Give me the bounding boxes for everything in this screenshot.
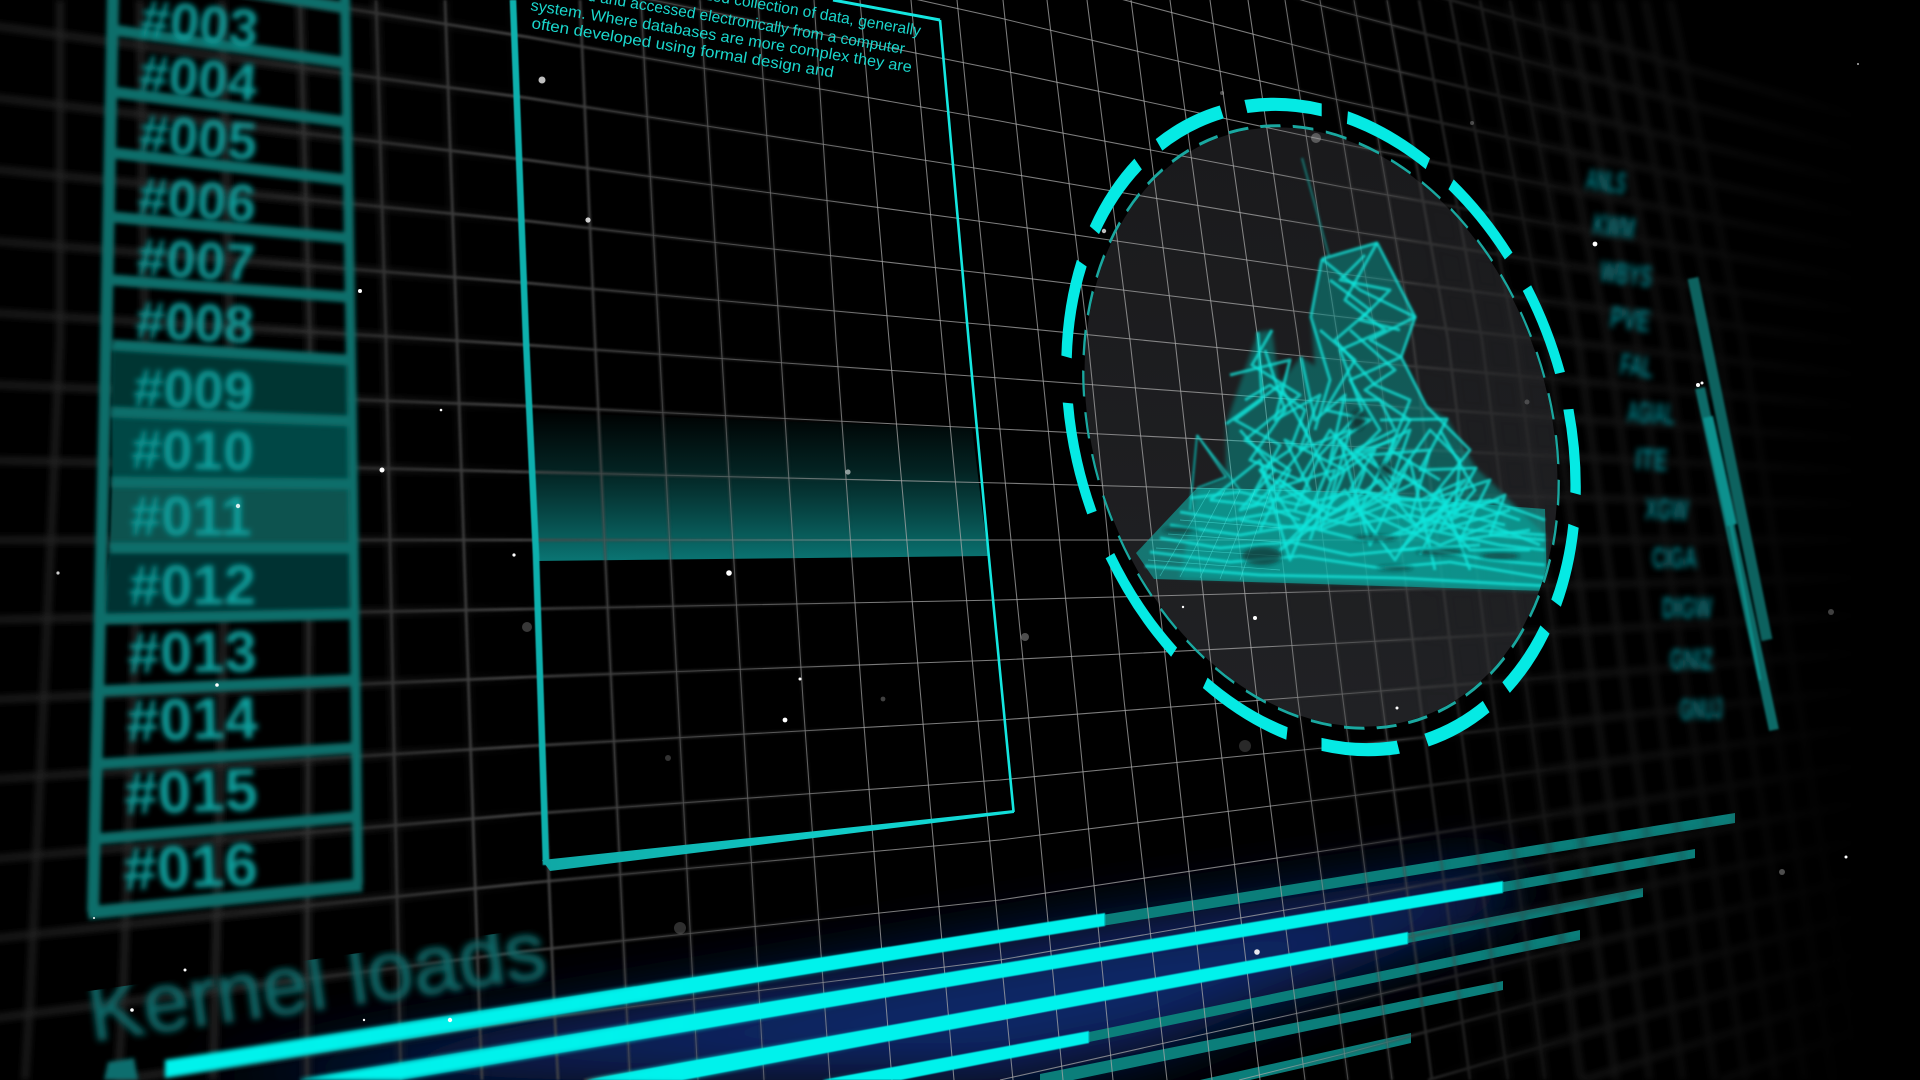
right code labels — [1584, 163, 1723, 727]
panel: highlighted band — [530, 412, 988, 561]
panel description text — [529, 0, 922, 81]
grid: mid blurred layer — [300, 0, 1529, 1080]
row labels — [122, 0, 261, 903]
label AGIAL: AGIAL — [1627, 396, 1675, 431]
table highlighted rows — [100, 345, 353, 619]
wireframe terrain — [1136, 158, 1547, 591]
text line 4: often developed using formal design and — [530, 15, 835, 81]
bottom heading: Kernel loads — [82, 903, 551, 1059]
label CIGA: CIGA — [1652, 542, 1697, 575]
outer segmented ring — [994, 49, 1648, 805]
row #009: #009 — [133, 358, 255, 422]
dark gaps in terrain — [1162, 410, 1520, 570]
label GNUJ: GNUJ — [1679, 693, 1723, 727]
row #016: #016 — [122, 830, 259, 903]
panel left edge — [513, 0, 546, 865]
row #011: #011 — [130, 484, 252, 548]
bars sharp right portion — [165, 881, 1503, 1080]
row #015: #015 — [123, 756, 259, 827]
row #013: #013 — [127, 619, 257, 686]
row #008: #008 — [134, 291, 255, 355]
grid: sharp layer — [604, 0, 1408, 1080]
row #006: #006 — [136, 167, 258, 234]
label GNIZ: GNIZ — [1670, 643, 1713, 677]
label ITE: ITE — [1635, 443, 1668, 478]
label FAL: FAL — [1618, 348, 1655, 385]
row #007: #007 — [135, 228, 256, 294]
panel bottom edge — [542, 810, 1014, 871]
label XGW: XGW — [1645, 493, 1689, 528]
row #012: #012 — [129, 553, 256, 618]
right vertical bars — [1693, 278, 1774, 730]
row #014: #014 — [126, 685, 259, 754]
label DIGW: DIGW — [1662, 592, 1712, 625]
disc: radar background — [1053, 117, 1589, 737]
blue glow behind bars — [190, 868, 1515, 1080]
wire strands — [1145, 158, 1547, 586]
row #004: #004 — [137, 44, 260, 113]
bars blurred left portion — [161, 948, 878, 1080]
inner dashed ring — [1051, 115, 1591, 739]
label ANLS: ANLS — [1584, 163, 1628, 201]
panel: description frame — [513, 0, 1014, 871]
row #010: #010 — [131, 418, 254, 482]
row #005: #005 — [137, 104, 259, 172]
panel top edge — [833, 0, 940, 20]
table frame and row lines — [88, 0, 362, 913]
label PVE: PVE — [1608, 301, 1652, 339]
floor mesh — [1148, 490, 1280, 580]
wire floor — [1136, 488, 1547, 591]
teal bar tracks — [1040, 813, 1735, 1080]
bright progress bars — [165, 881, 1503, 1080]
circular radar widget — [1061, 98, 1581, 756]
partial blurred row marker — [104, 1058, 138, 1080]
panel right edge — [940, 20, 1014, 812]
label KWM: KWM — [1591, 208, 1637, 246]
wire mass — [1180, 243, 1547, 591]
label WBYS: WBYS — [1598, 255, 1654, 294]
left list panel — [88, 0, 362, 913]
